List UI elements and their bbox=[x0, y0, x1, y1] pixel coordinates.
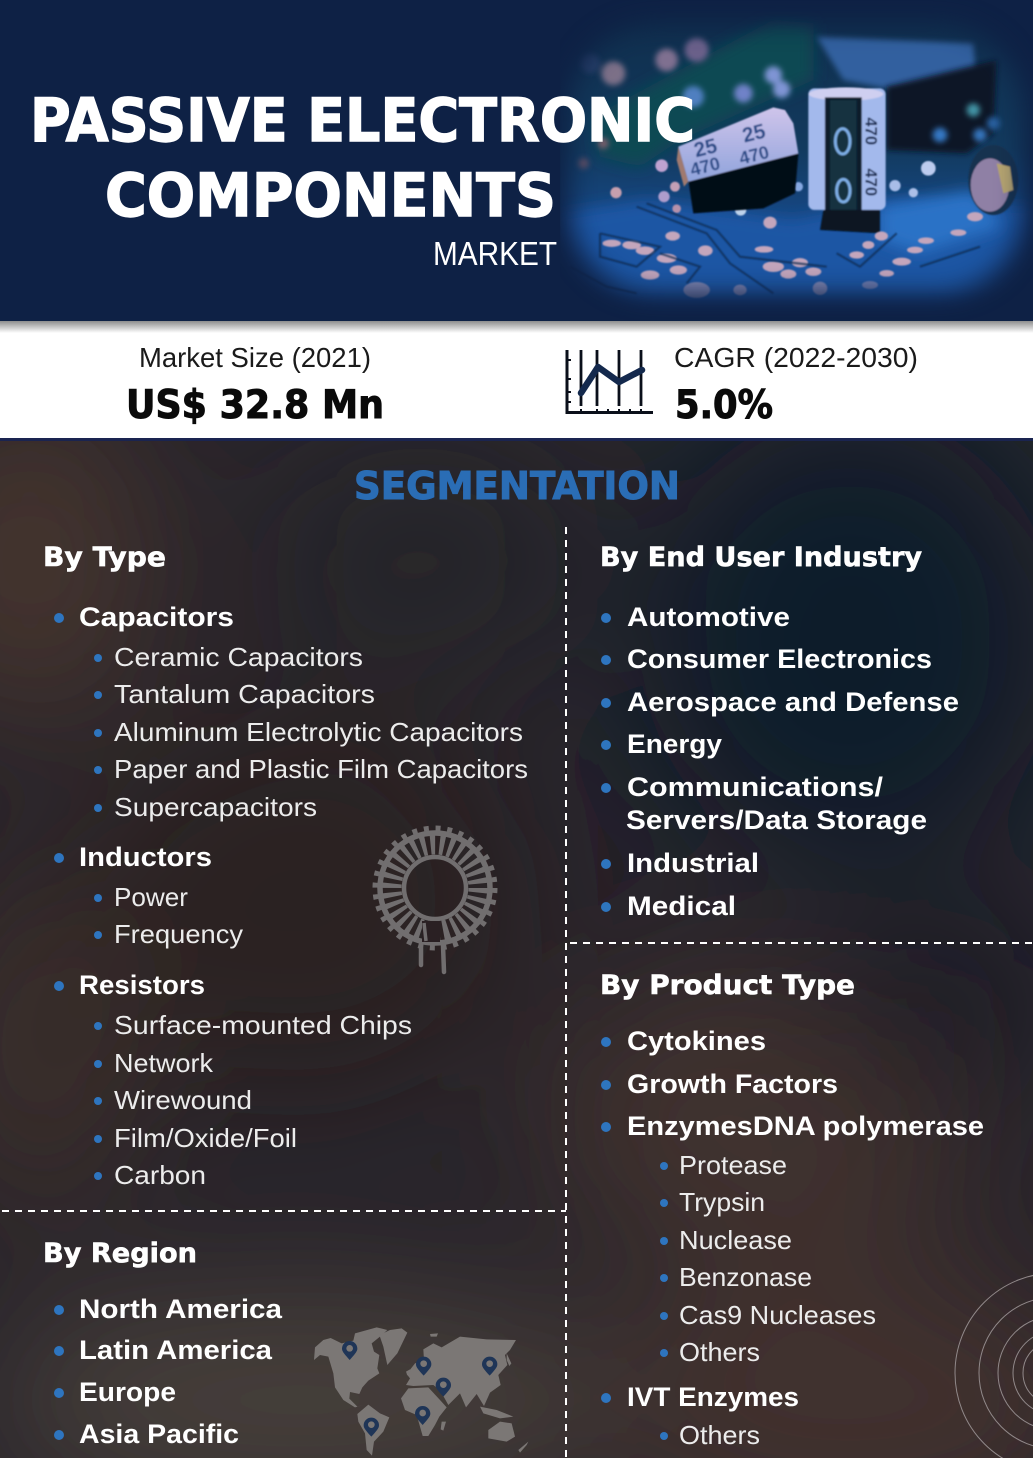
panel: segmentation bbox=[0, 390, 1033, 1458]
item: nuclease: Nuclease bbox=[679, 1225, 792, 1255]
panel: by type bbox=[43, 542, 528, 1190]
capacitor: horizontal bbox=[677, 107, 798, 213]
metric: CAGR bbox=[674, 342, 918, 428]
item: others: Others bbox=[679, 1420, 760, 1450]
item: growth factors: Growth Factors bbox=[627, 1069, 838, 1099]
title: PASSIVE ELECTRONIC bbox=[30, 86, 695, 156]
panel: key metrics bbox=[0, 321, 1033, 441]
heading: by product type: By Product Type bbox=[600, 970, 855, 1001]
item: europe: Europe bbox=[79, 1377, 176, 1407]
item: supercapacitors: Supercapacitors bbox=[114, 792, 317, 822]
capacitor: horizontal: 25 bbox=[740, 120, 768, 148]
capacitor: vertical bbox=[808, 87, 886, 233]
heading: by end user industry: By End User Industry bbox=[600, 542, 922, 573]
item: communications/servers/data storage bbox=[601, 772, 927, 835]
photo: capacitors on a circuit board bbox=[560, 18, 1033, 308]
item: film/oxide/foil: Film/Oxide/Foil bbox=[114, 1123, 297, 1153]
metric: CAGR: 5.0% bbox=[675, 383, 773, 428]
capacitor: vertical: 470 bbox=[862, 117, 881, 145]
item: north america: North America bbox=[79, 1294, 283, 1324]
metric: market size bbox=[126, 342, 384, 428]
item: surface-mounted chips: Surface-mounted Chips bbox=[114, 1010, 412, 1040]
item: frequency: Frequency bbox=[114, 919, 243, 949]
item: ivt enzymes: IVT Enzymes bbox=[627, 1382, 799, 1412]
subtitle: MARKET bbox=[433, 235, 557, 272]
capacitor: horizontal: 470 bbox=[688, 153, 722, 180]
item: aluminum electrolytic capacitors: Aluminum Electrolytic Capacitors bbox=[114, 717, 523, 747]
icon: world map with pins bbox=[314, 1327, 528, 1456]
item: capacitors: Capacitors bbox=[79, 602, 234, 632]
item: protease: Protease bbox=[679, 1150, 787, 1180]
item: enzymesdna polymerase: EnzymesDNA polymerase bbox=[627, 1111, 984, 1141]
background gradient bbox=[0, 390, 1033, 1458]
panel: by product type bbox=[600, 970, 984, 1450]
metric: market size: Market Size (2021) bbox=[139, 342, 371, 373]
icon: toroidal inductor bbox=[375, 828, 495, 972]
item: latin america: Latin America bbox=[79, 1335, 273, 1365]
item: energy: Energy bbox=[627, 729, 722, 759]
item: others: Others bbox=[679, 1337, 760, 1367]
item: trypsin: Trypsin bbox=[679, 1187, 765, 1217]
heading: by type: By Type bbox=[43, 542, 166, 573]
item: paper and plastic film capacitors: Paper and Plastic Film Capacitors bbox=[114, 754, 528, 784]
item: consumer electronics: Consumer Electronics bbox=[627, 644, 932, 674]
item: inductors: Inductors bbox=[79, 842, 212, 872]
metric: market size: US$ 32.8 Mn bbox=[126, 383, 384, 428]
item: ceramic capacitors: Ceramic Capacitors bbox=[114, 642, 363, 672]
item: asia pacific: Asia Pacific bbox=[79, 1419, 239, 1449]
item: carbon: Carbon bbox=[114, 1160, 206, 1190]
icon: line chart bbox=[567, 350, 653, 412]
item: cas9 nucleases: Cas9 Nucleases bbox=[679, 1300, 876, 1330]
capacitor: horizontal: 25 bbox=[692, 134, 720, 162]
title bbox=[30, 86, 695, 231]
title: COMPONENTS bbox=[105, 161, 556, 231]
item: resistors: Resistors bbox=[79, 970, 205, 1000]
item: cytokines: Cytokines bbox=[627, 1026, 766, 1056]
item: power: Power bbox=[114, 882, 188, 912]
capacitor: horizontal: 470 bbox=[737, 142, 771, 169]
item: network: Network bbox=[114, 1048, 214, 1078]
capacitor: round at right bbox=[968, 145, 1018, 215]
item: aerospace and defense: Aerospace and Defense bbox=[627, 687, 959, 717]
item: tantalum capacitors: Tantalum Capacitors bbox=[114, 679, 375, 709]
panel: by region bbox=[43, 1238, 528, 1456]
item: communications/servers/data storage: Servers/Data Storage bbox=[626, 805, 927, 835]
panel: by end user industry bbox=[600, 542, 959, 921]
metric: CAGR: CAGR (2022-2030) bbox=[674, 342, 918, 373]
heading: by region: By Region bbox=[43, 1238, 197, 1269]
item: automotive: Automotive bbox=[627, 602, 790, 632]
item: wirewound: Wirewound bbox=[114, 1085, 252, 1115]
capacitor: vertical: 470 bbox=[862, 168, 881, 196]
decoration: concentric circles bbox=[955, 1273, 1033, 1458]
heading: segmentation: SEGMENTATION bbox=[354, 464, 680, 508]
item: benzonase: Benzonase bbox=[679, 1262, 812, 1292]
item: industrial: Industrial bbox=[627, 848, 759, 878]
item: medical: Medical bbox=[627, 891, 736, 921]
panel: header bbox=[0, 0, 1033, 330]
solder pads bbox=[602, 212, 983, 298]
item: communications/servers/data storage: Communications/ bbox=[627, 772, 884, 802]
